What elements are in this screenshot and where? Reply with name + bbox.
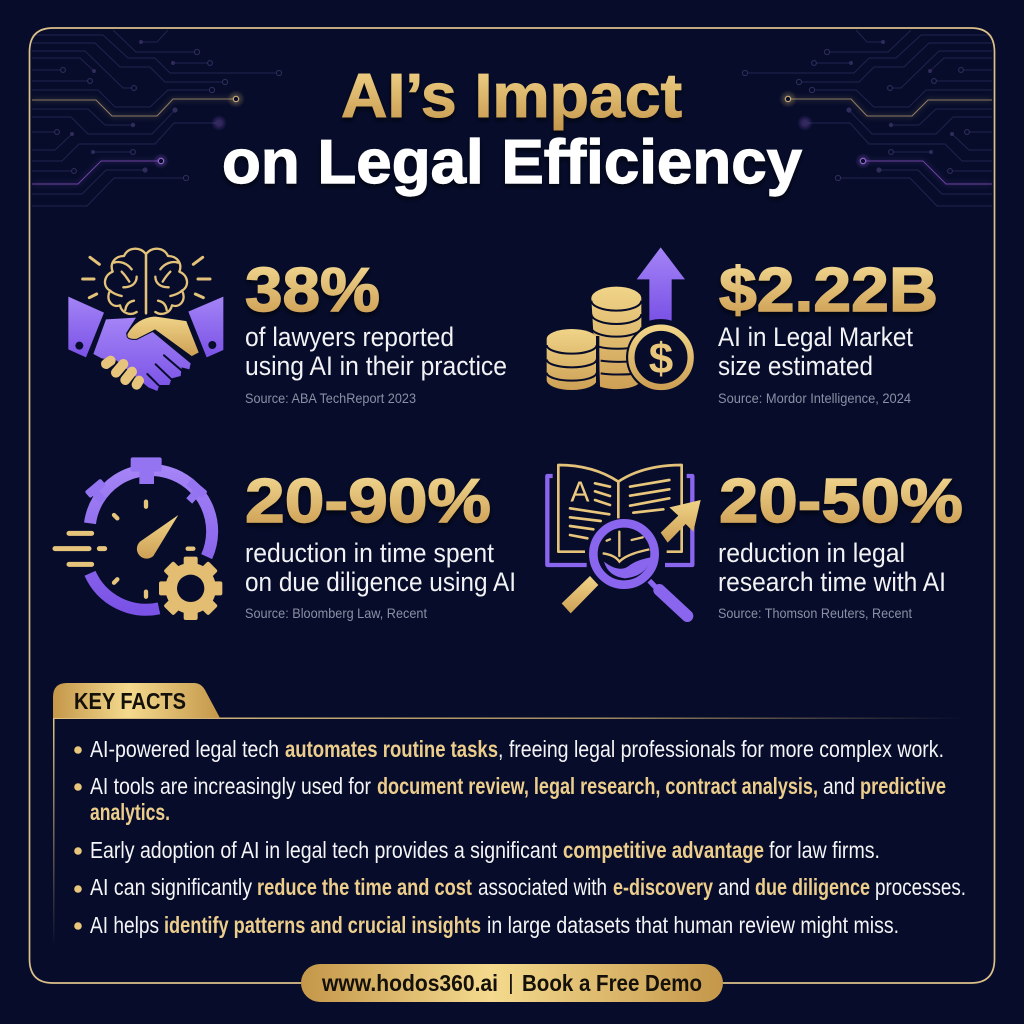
panel: due diligence time (55, 457, 516, 624)
fact 2: document review, legal research, contract analysis, (377, 773, 818, 799)
bullet markers (74, 746, 82, 930)
description: of lawyers reported (245, 322, 454, 352)
icon: coins and arrow: $ (649, 334, 673, 383)
fact 4: reduce the time and cost (257, 874, 472, 900)
panel: lawyers using AI (68, 249, 507, 406)
description: research time with AI (718, 567, 946, 597)
fact 5: in large datasets that human review might miss. (487, 912, 899, 938)
footer call to action pill (301, 964, 723, 1002)
icon: book, magnifier and arrow (547, 465, 701, 616)
panel: market size (547, 247, 938, 406)
key facts left rule (53, 718, 54, 948)
fact 2: analytics. (90, 799, 170, 825)
source: Source: Thomson Reuters, Recent (718, 605, 912, 621)
circuit decoration right (742, 30, 992, 206)
fact 5: identify patterns and crucial insights (164, 912, 481, 938)
stat: $2.22B: $2.22B (719, 256, 938, 325)
circuit decoration left (32, 30, 282, 206)
title (222, 62, 803, 197)
title: on Legal Efficiency (222, 128, 803, 197)
fact 2: AI tools are increasingly used for (90, 773, 371, 799)
key facts tab: KEY FACTS (74, 688, 186, 714)
title: AI’s Impact (341, 62, 682, 131)
key facts tab (53, 683, 220, 718)
fact 4: e-discovery (613, 874, 713, 900)
fact 1: AI-powered legal tech (90, 736, 279, 762)
fact 4: associated with (478, 874, 607, 900)
source: Source: ABA TechReport 2023 (245, 390, 416, 406)
description: using AI in their practice (245, 351, 507, 381)
description: on due diligence using AI (245, 567, 516, 597)
fact 1: , freeing legal professionals for more complex work. (498, 736, 944, 762)
icon: coins and arrow (547, 247, 696, 392)
fact 3: Early adoption of AI in legal tech provides a significant (90, 837, 558, 863)
description: reduction in legal (718, 538, 905, 568)
panel: key facts (53, 683, 966, 948)
fact 2: and (823, 773, 855, 799)
panel: legal research time (547, 465, 963, 621)
description: reduction in time spent (245, 538, 494, 568)
description: AI in Legal Market (718, 322, 913, 352)
fact 4: processes. (875, 874, 966, 900)
stat: 38%: 38% (245, 256, 380, 325)
source: Source: Bloomberg Law, Recent (245, 605, 427, 621)
stat: 20-90%: 20-90% (245, 467, 491, 536)
icon: book, magnifier and arrow: A (570, 477, 590, 509)
fact 2: predictive (860, 773, 946, 799)
fact 1: automates routine tasks (285, 736, 498, 762)
icon: brain and handshake (68, 249, 223, 391)
fact 3: for law firms. (769, 837, 880, 863)
stat: 20-50%: 20-50% (719, 467, 963, 536)
source: Source: Mordor Intelligence, 2024 (718, 390, 911, 406)
footer call to action pill: Book a Free Demo (522, 970, 702, 996)
fact 3: competitive advantage (563, 837, 764, 863)
description: size estimated (718, 351, 873, 381)
icon: stopwatch and gear (55, 457, 226, 624)
footer call to action pill: www.hodos360.ai (321, 970, 498, 996)
fact 4: AI can significantly (90, 874, 252, 900)
fact 4: due diligence (755, 874, 870, 900)
fact 4: and (718, 874, 750, 900)
fact 5: AI helps (90, 912, 159, 938)
key facts top rule (53, 718, 965, 719)
